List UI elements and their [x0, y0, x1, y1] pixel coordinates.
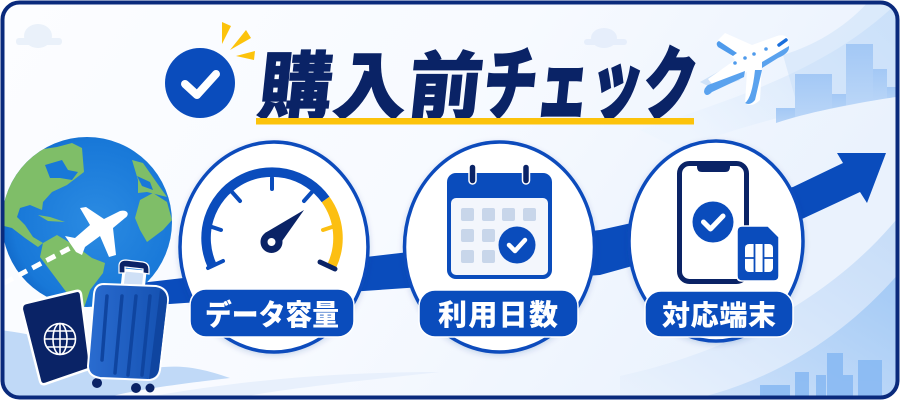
- panel: compatible devices: [629, 141, 803, 341]
- panel: data capacity: [180, 142, 368, 352]
- bottom left swoosh: [0, 330, 230, 400]
- title underline: [256, 118, 694, 124]
- cloud: top left: [16, 24, 62, 48]
- icon: gauge: [206, 172, 338, 269]
- globe: [0, 137, 172, 320]
- buildings: top right: [776, 44, 896, 128]
- flight path: [18, 246, 70, 276]
- icon: check badge: [165, 22, 255, 118]
- icon: passport: [22, 291, 90, 384]
- label: [419, 290, 578, 337]
- panel: days of use: [404, 142, 594, 352]
- title: 購入前: [254, 46, 487, 129]
- passport globe: [44, 324, 76, 354]
- icon: airplane on globe: [65, 207, 128, 257]
- sparkle rays: [222, 22, 255, 60]
- label: データ容量: [205, 298, 339, 332]
- continents: [0, 143, 172, 320]
- title: [256, 44, 696, 118]
- icon: phone with SIM: [680, 163, 779, 282]
- icon: airplane top right: [700, 33, 789, 105]
- label: [645, 291, 793, 337]
- buildings: bottom right: [760, 353, 882, 400]
- bottom right swoosh: [660, 220, 896, 390]
- arrow: [140, 153, 886, 306]
- label: [190, 289, 354, 337]
- icon: suitcase: [88, 260, 168, 393]
- top right swoosh: [729, 9, 896, 122]
- icon: calendar: [447, 164, 552, 279]
- label: 対応端末: [662, 300, 776, 331]
- title: チェック: [479, 40, 702, 130]
- cloud: top centre: [584, 28, 627, 48]
- label: 利用日数: [438, 299, 558, 332]
